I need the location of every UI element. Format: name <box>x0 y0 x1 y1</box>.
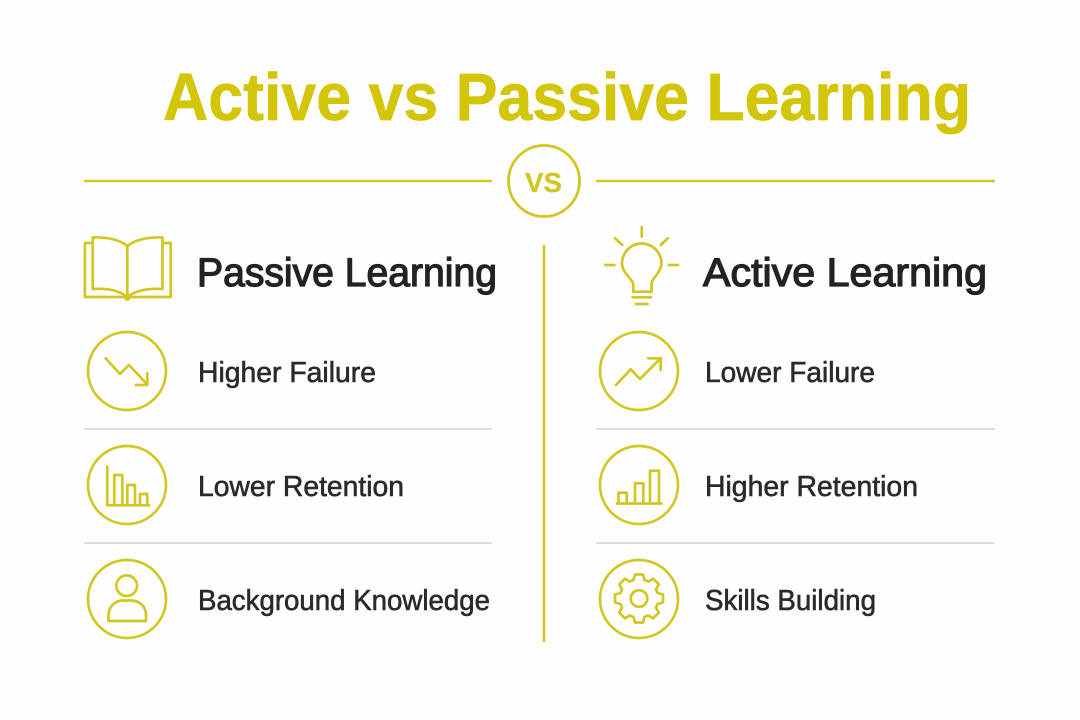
heading: active learning: Active Learning <box>703 251 987 295</box>
icon: open book <box>85 237 171 300</box>
panel: passive learning <box>84 237 497 638</box>
row: skills building: Skills Building <box>705 585 876 617</box>
row: lower failure: Lower Failure <box>705 357 875 389</box>
title: Active vs Passive Learning <box>163 61 971 135</box>
row: lower failure <box>600 332 875 410</box>
icon: light bulb <box>605 227 678 304</box>
row: lower retention: Lower Retention <box>198 471 404 503</box>
vs divider: VS <box>525 167 562 198</box>
panel: active learning <box>596 227 995 638</box>
row: higher retention <box>600 446 918 524</box>
vs divider <box>84 146 995 216</box>
row: skills building <box>600 560 876 638</box>
row: higher retention: Higher Retention <box>705 471 918 503</box>
row: background knowledge <box>88 560 490 638</box>
row: background knowledge: Background Knowledge <box>198 585 490 617</box>
row: lower retention <box>88 446 404 524</box>
row: higher failure: Higher Failure <box>198 357 376 389</box>
heading: passive learning: Passive Learning <box>197 251 497 295</box>
row: higher failure <box>88 332 376 410</box>
